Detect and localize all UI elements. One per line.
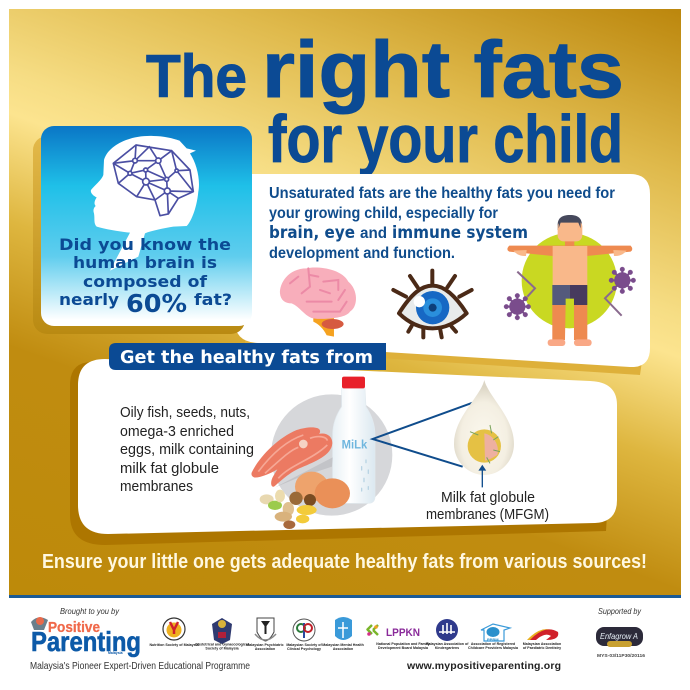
logo: Malaysian Mental Health Association: Malaysian Mental Health (322, 643, 364, 647)
defence chevrons (517, 272, 622, 316)
MFGM label: membranes (MFGM) (426, 506, 549, 523)
logo: Obstetrical and Gynaecological Society (195, 618, 249, 650)
logo: Enfagrow: Enfagrow A (600, 632, 638, 641)
food list text: membranes (120, 478, 193, 495)
logo: Malaysian Mental Health Association (322, 617, 364, 651)
logo: Positive Parenting (31, 617, 141, 657)
MFGM label: Milk fat globule (441, 489, 535, 506)
icon: brain (280, 268, 356, 337)
logo: Positive Parenting: Parenting (31, 626, 141, 657)
milk bottle: MiLk (342, 438, 368, 452)
milk bottle (333, 377, 375, 503)
title: The (146, 43, 247, 110)
grey circle backdrop (271, 394, 392, 516)
logo: Malaysian Psychiatric Association: Malaysian Psychiatric (246, 643, 284, 647)
food list text: milk fat globule (120, 460, 219, 477)
intro text: brain, eye (269, 223, 355, 242)
logo: Malaysian Association of Kindergartens: Malaysian Association of (426, 642, 469, 646)
logo: Malaysian Society of Clinical Psychology (286, 619, 322, 651)
logo: PPBM childcare providers (468, 624, 519, 650)
salmon steak (251, 427, 333, 487)
logo: Obstetrical and Gynaecological Society: Obstetrical and Gynaecological (195, 642, 249, 646)
white card (235, 174, 650, 367)
question text: composed of (83, 272, 208, 291)
logo: LPPKN: National Population and Family (376, 642, 430, 646)
question text: 60% (126, 289, 187, 318)
panel shadow (70, 362, 608, 545)
nuts and seeds (260, 490, 317, 529)
question text: nearly (59, 290, 120, 309)
logo: Positive Parenting: Malaysia (108, 651, 123, 655)
intro text: and (360, 225, 387, 242)
eggs (295, 472, 328, 502)
food list text: omega-3 enriched (120, 423, 234, 440)
panel: healthy fat sources (70, 343, 617, 545)
logo: Obstetrical and Gynaecological Society: Society of Malaysia (205, 646, 240, 650)
blue rule under gold panel (9, 595, 681, 598)
question text: human brain is (73, 253, 217, 272)
logo: LPPKN: LPPKN (386, 627, 420, 639)
icon: head with brain network (91, 136, 199, 271)
logo: Malaysian Society of Clinical Psychology: Malaysian Society of (286, 643, 322, 647)
food list text (120, 404, 254, 495)
logo: Nutrition Society of Malaysia (149, 618, 200, 647)
supported by: Supported by (598, 607, 642, 616)
footer (30, 607, 646, 672)
logo: Enfagrow (596, 627, 643, 647)
icon: body with viruses (504, 215, 636, 346)
panel: did you know (33, 126, 252, 334)
logo: Malaysian Mental Health Association: Association (333, 647, 353, 651)
intro text: immune system (392, 223, 528, 242)
milk drop with globule (454, 380, 514, 475)
logo: LPPKN (367, 625, 430, 650)
intro text: Unsaturated fats are the healthy fats you need for (269, 185, 615, 202)
title: right fats (262, 25, 624, 114)
brought to you by: Brought to you by (60, 607, 120, 616)
white card (78, 359, 617, 534)
logo: Malaysian Association of Kindergartens: Kindergartens (435, 646, 459, 650)
logo: LPPKN: Development Board Malaysia (378, 646, 429, 650)
person (507, 215, 632, 346)
logo: Positive Parenting: Positive (48, 619, 100, 636)
logo: Paediatric Dentistry: of Paediatric Dentistry (523, 646, 561, 650)
icon: eye (393, 271, 472, 337)
logo: PPBM childcare providers: Association of Registered (471, 642, 515, 646)
logo: Nutrition Society of Malaysia: Nutrition Society of Malaysia (149, 643, 200, 647)
approval code: MYS-03/11P30/20116 (597, 653, 646, 658)
website: www.mypositiveparenting.org (406, 660, 561, 672)
logo: Paediatric Dentistry: Malaysian Association (523, 642, 561, 646)
title (146, 25, 624, 177)
logo: Malaysian Psychiatric Association: Association (255, 647, 275, 651)
green circle (522, 233, 617, 328)
viruses (504, 267, 636, 320)
panel: unsaturated fats (235, 174, 650, 375)
logo: Malaysian Association of Kindergartens (426, 619, 469, 650)
logo: PPBM childcare providers: Childcare Providers Malaysia (468, 646, 519, 650)
heading badge: Get the healthy fats from (120, 347, 373, 368)
food list text: Oily fish, seeds, nuts, (120, 404, 250, 421)
logo: Malaysian Society of Clinical Psychology: Clinical Psychology (287, 647, 321, 651)
title: for your child (268, 102, 623, 177)
food list text: eggs, milk containing (120, 441, 254, 458)
intro text (269, 185, 615, 262)
blue card (41, 126, 252, 326)
logo: Malaysian Psychiatric Association (246, 618, 284, 651)
question text: fat? (194, 290, 232, 309)
tagline: Malaysia's Pioneer Expert-Driven Educational Programme (30, 661, 250, 672)
panel shadow (33, 136, 245, 334)
logo: Paediatric Dentistry (523, 629, 561, 650)
MFGM label (426, 489, 549, 523)
question text (59, 235, 232, 318)
intro text: development and function. (269, 245, 455, 262)
intro text: your growing child, especially for (269, 205, 498, 222)
arrow to globule (480, 466, 485, 487)
food illustration (251, 377, 514, 529)
connector lines (373, 403, 473, 467)
logo: PPBM childcare providers: PPBM (487, 637, 499, 642)
panel shadow (245, 300, 645, 375)
question text: Did you know the (59, 235, 231, 254)
